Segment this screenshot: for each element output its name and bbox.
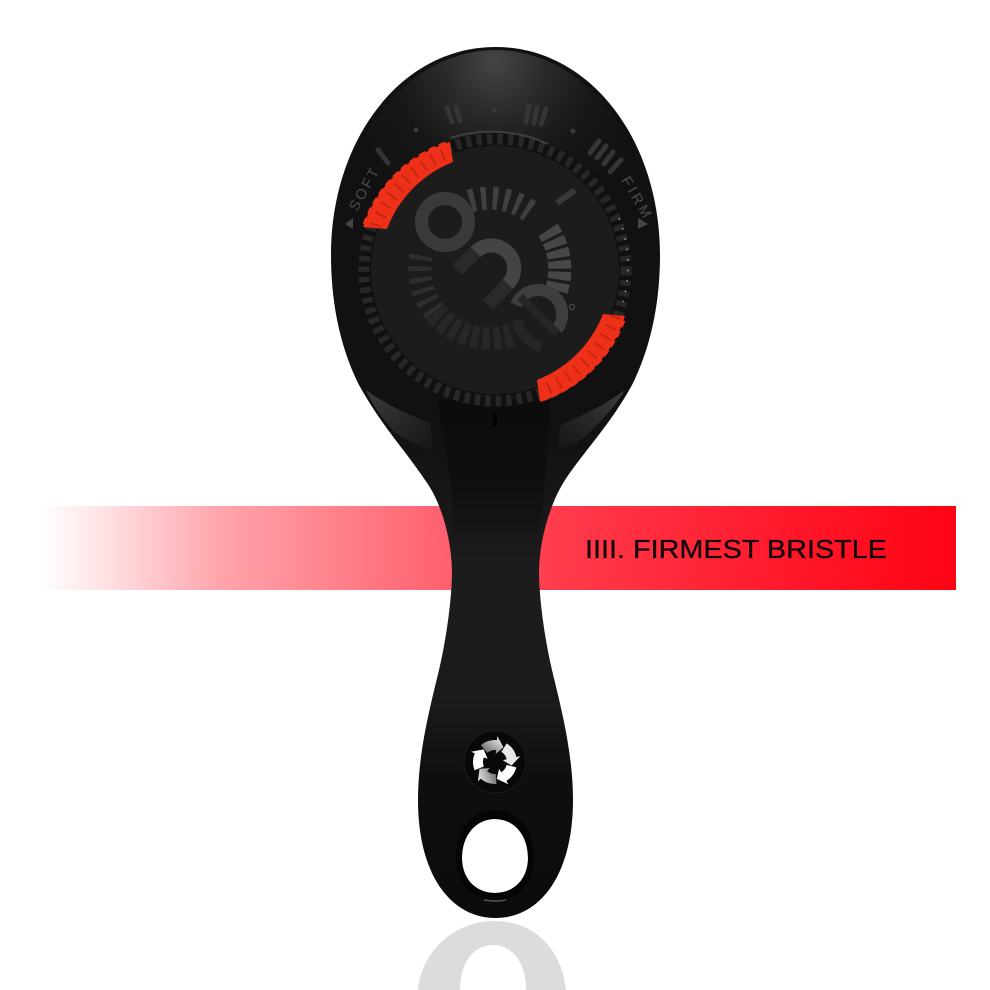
sunburst ticks bottom bbox=[435, 312, 512, 338]
badge disc bbox=[464, 731, 526, 793]
hairbrush bbox=[331, 47, 660, 918]
logo: one bbox=[422, 198, 562, 347]
hole highlight bbox=[484, 900, 506, 901]
dial face bbox=[371, 146, 619, 394]
red grip top left bbox=[363, 142, 453, 229]
scale dot left bbox=[414, 128, 418, 132]
band label: IIII. FIRMEST BRISTLE bbox=[585, 534, 887, 564]
label: FIRM: FIRM bbox=[618, 174, 656, 224]
right shoulder panel bbox=[557, 390, 625, 450]
adjustment dial bbox=[358, 132, 632, 407]
dial knurled edge bbox=[364, 139, 626, 401]
dial right edge highlights bbox=[619, 218, 628, 302]
sunburst ticks right bbox=[548, 230, 560, 292]
label: SOFT: SOFT bbox=[347, 164, 384, 214]
dial outer rim bbox=[358, 133, 632, 407]
left shoulder panel bbox=[366, 390, 434, 453]
logo letter n bbox=[457, 252, 508, 305]
scale dot right bbox=[570, 128, 576, 134]
neck slot bbox=[493, 414, 497, 426]
recycle badge bbox=[464, 731, 526, 793]
scale mark: II bbox=[447, 107, 460, 122]
red gradient band bbox=[40, 506, 956, 590]
sunburst ticks left bbox=[420, 250, 435, 312]
logo letter e bbox=[516, 290, 562, 329]
recycle arrows bbox=[466, 736, 522, 791]
scale dot centre bbox=[492, 108, 496, 112]
brush body silhouette bbox=[331, 47, 660, 918]
position marker bbox=[557, 190, 575, 203]
sunburst ticks top bbox=[470, 198, 532, 213]
logo letter o bbox=[422, 198, 468, 246]
hanging hole recess bbox=[456, 810, 534, 900]
arrow: firm bbox=[638, 218, 648, 229]
red grip bottom right bbox=[537, 314, 625, 402]
scale mark: III bbox=[526, 106, 546, 124]
registered mark bbox=[570, 304, 574, 310]
dial top highlight bbox=[450, 132, 548, 144]
scale mark: I bbox=[378, 150, 388, 163]
neck bbox=[437, 400, 550, 560]
head top highlight bbox=[334, 50, 656, 460]
scale mark: IIII bbox=[590, 141, 621, 172]
reflection of handle bbox=[418, 921, 566, 990]
arrow: soft bbox=[345, 218, 353, 229]
